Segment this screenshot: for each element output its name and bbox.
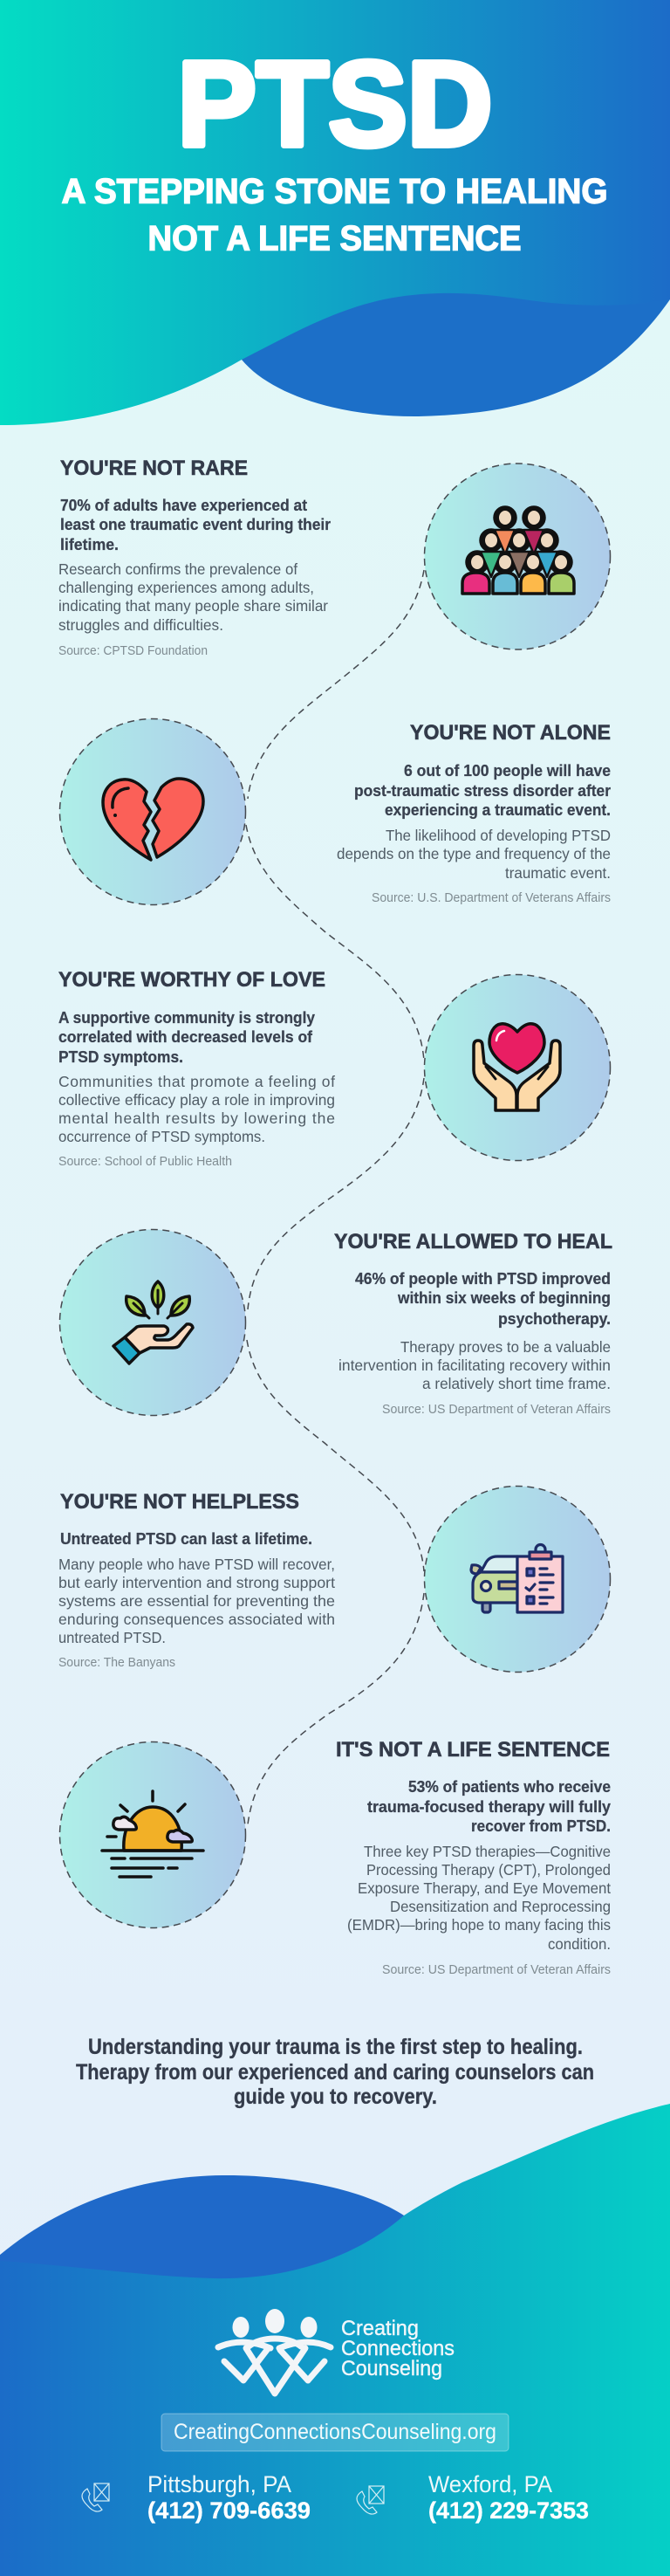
subtitle: NOT A LIFE SENTENCE (148, 219, 522, 258)
section: you're not alone (59, 719, 611, 905)
footer gradient shape (0, 2104, 670, 2576)
icon: phone and envelope (82, 2483, 109, 2511)
body text: collective efficacy play a role in improving (58, 1091, 335, 1109)
phone number: (412) 229-7353 (428, 2497, 589, 2524)
source: Source: The Banyans (58, 1655, 175, 1670)
key statistic: lifetime. (60, 535, 119, 553)
closing message (76, 2035, 594, 2109)
title: PTSD (178, 37, 492, 171)
header banner (0, 0, 670, 425)
source: Source: US Department of Veteran Affairs (382, 1962, 611, 1977)
section: you're not rare (58, 457, 611, 658)
body text: depends on the type and frequency of the (337, 845, 611, 862)
body text: Therapy proves to be a valuable (400, 1338, 611, 1356)
header gradient shape (0, 0, 670, 425)
body text: but early intervention and strong support (58, 1574, 335, 1591)
location: Wexford, PA (428, 2471, 552, 2497)
phone number: (412) 709-6639 (147, 2497, 311, 2524)
logo wordmark (341, 2317, 455, 2380)
source: Source: U.S. Department of Veterans Affairs (372, 890, 611, 905)
key statistic: 53% of patients who receive (408, 1777, 611, 1796)
icon circle: hands holding heart (424, 974, 611, 1161)
icon: phone and envelope (357, 2486, 384, 2514)
key statistic: A supportive community is strongly (58, 1008, 316, 1027)
key statistic (367, 1777, 612, 1835)
heading: YOU'RE ALLOWED TO HEAL (334, 1230, 612, 1254)
body text (58, 560, 328, 634)
body text: challenging experiences among adults, (58, 579, 314, 596)
source: Source: School of Public Health (58, 1154, 232, 1169)
source: Source: US Department of Veteran Affairs (382, 1402, 611, 1417)
source: Source: CPTSD Foundation (58, 643, 208, 658)
body text: condition. (548, 1935, 611, 1953)
heading: YOU'RE NOT ALONE (410, 721, 611, 745)
body text: untreated PTSD. (58, 1629, 166, 1646)
section: you're not helpless (58, 1486, 611, 1673)
body text: Desensitization and Reprocessing (390, 1898, 611, 1915)
contact: Pittsburgh (82, 2471, 311, 2524)
key statistic (60, 496, 331, 553)
key statistic (354, 761, 611, 819)
body text: Communities that promote a feeling of (58, 1073, 335, 1090)
body text: systems are essential for preventing the (58, 1592, 335, 1610)
key statistic: correlated with decreased levels of (58, 1027, 313, 1046)
closing message: guide you to recovery. (234, 2085, 437, 2109)
key statistic (58, 1008, 316, 1066)
icon circle: sunrise (59, 1742, 246, 1927)
body text: mental health results by lowering the (58, 1109, 335, 1127)
closing message: Understanding your trauma is the first step to healing. (88, 2035, 583, 2059)
icon circle: car and checklist (424, 1486, 611, 1673)
dashed connector path (246, 570, 424, 1824)
key statistic: within six weeks of beginning (397, 1288, 611, 1307)
key statistic: post-traumatic stress disorder after (354, 781, 611, 800)
key statistic: experiencing a traumatic event. (385, 800, 611, 819)
section: you're worthy of love (58, 968, 611, 1169)
body text: a relatively short time frame. (422, 1375, 611, 1392)
icon circle: hand with leaves (59, 1229, 246, 1416)
body text (338, 1338, 611, 1392)
logo wordmark: Creating (341, 2317, 419, 2340)
body text: occurrence of PTSD symptoms. (58, 1128, 265, 1145)
body text (58, 1073, 335, 1145)
website button: CreatingConnectionsCounseling.org (174, 2420, 496, 2444)
body text: (EMDR)—bring hope to many facing this (347, 1916, 611, 1934)
body text: Three key PTSD therapies—Cognitive (364, 1843, 611, 1860)
key statistic: recover from PTSD. (471, 1817, 611, 1835)
location: Pittsburgh, PA (147, 2471, 291, 2497)
body text (58, 1556, 335, 1646)
website button (161, 2414, 509, 2451)
key statistic: 70% of adults have experienced at (60, 496, 307, 514)
body text: struggles and difficulties. (58, 616, 223, 634)
body text: enduring consequences associated with (58, 1611, 335, 1628)
logo wordmark: Counseling (341, 2357, 442, 2380)
key statistic: 46% of people with PTSD improved (355, 1269, 611, 1288)
body text (337, 827, 611, 882)
key statistic (355, 1269, 611, 1328)
closing message: Therapy from our experienced and caring counselors can (76, 2060, 594, 2085)
logo (218, 2309, 455, 2394)
key statistic: PTSD symptoms. (58, 1048, 183, 1066)
section: you're allowed to heal (59, 1229, 612, 1417)
heading: YOU'RE NOT RARE (60, 457, 248, 480)
logo wordmark: Connections (341, 2337, 455, 2360)
icon circle: group of people (424, 464, 611, 649)
body text: Exposure Therapy, and Eye Movement (358, 1879, 611, 1897)
key statistic: least one traumatic event during their (60, 515, 331, 533)
key statistic: Untreated PTSD can last a lifetime. (60, 1529, 312, 1548)
contact: Wexford (357, 2471, 589, 2524)
heading: YOU'RE NOT HELPLESS (60, 1490, 299, 1514)
body text: indicating that many people share similar (58, 597, 328, 615)
subtitle (61, 172, 607, 258)
logo mark (218, 2309, 331, 2394)
body text: intervention in facilitating recovery within (338, 1357, 611, 1374)
footer banner (0, 2104, 670, 2576)
header blue wave (242, 288, 670, 416)
body text: traumatic event. (505, 864, 611, 882)
key statistic: trauma-focused therapy will fully (367, 1797, 612, 1816)
subtitle: A STEPPING STONE TO HEALING (61, 172, 607, 210)
heading: IT'S NOT A LIFE SENTENCE (336, 1738, 610, 1762)
footer blue wave (0, 2175, 404, 2305)
heading: YOU'RE WORTHY OF LOVE (58, 968, 325, 992)
body text: Many people who have PTSD will recover, (58, 1556, 335, 1573)
icon circle: broken heart (59, 719, 246, 904)
key statistic: 6 out of 100 people will have (404, 761, 611, 780)
section: it's not a life sentence (59, 1738, 612, 1977)
key statistic: psychotherapy. (498, 1309, 611, 1328)
body text: Processing Therapy (CPT), Prolonged (366, 1861, 611, 1879)
body text (347, 1843, 611, 1953)
body text: The likelihood of developing PTSD (386, 827, 611, 844)
body text: Research confirms the prevalence of (58, 560, 297, 578)
